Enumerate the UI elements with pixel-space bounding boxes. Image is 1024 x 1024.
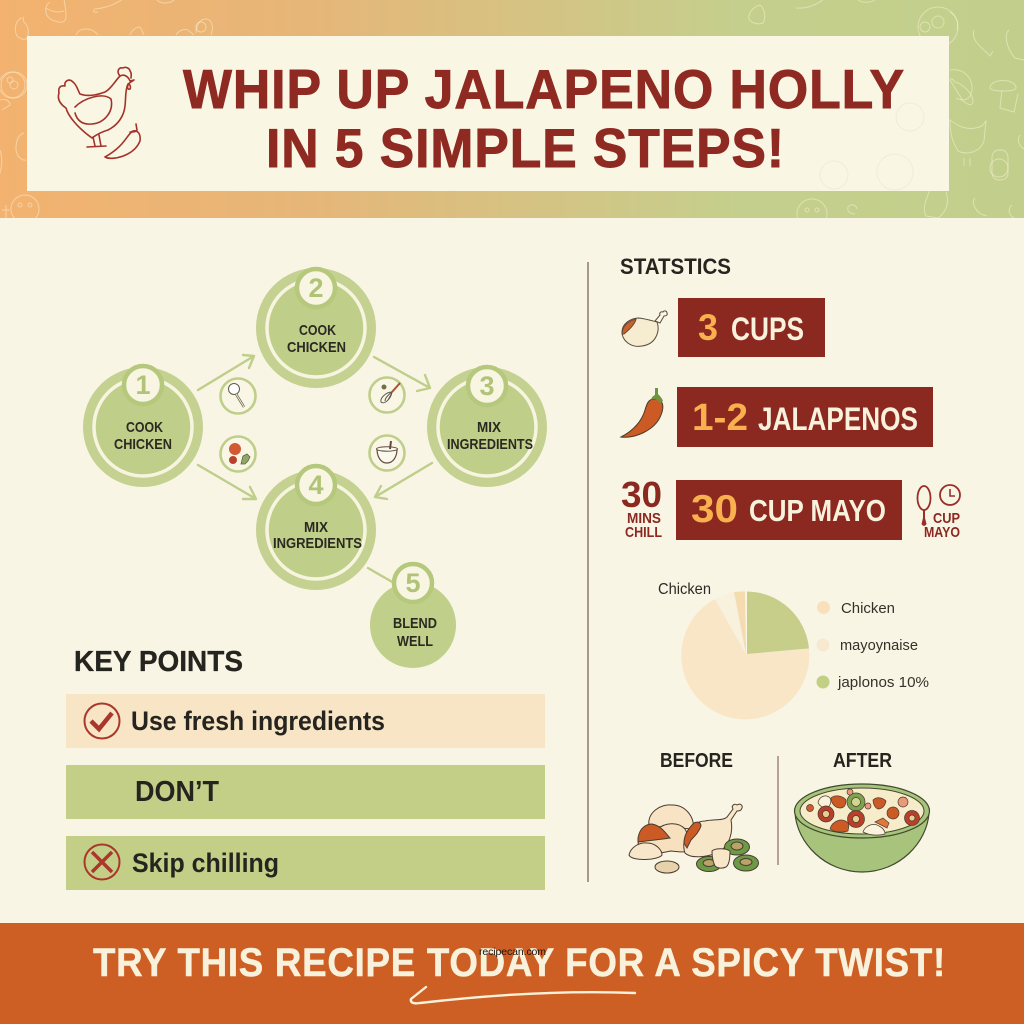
footer banner <box>0 923 1024 1024</box>
icon: chicken leg <box>622 311 667 346</box>
stat bar: jalapenos <box>677 387 933 447</box>
icon: spoon <box>220 378 256 414</box>
icon: check <box>84 704 120 738</box>
step 4: MIX <box>304 519 328 536</box>
icon: whisk <box>370 378 404 412</box>
pie legend: Chicken <box>841 600 895 617</box>
do item: Use fresh ingredients <box>131 706 385 736</box>
icon: spoon, clock and label: MAYO <box>924 524 960 541</box>
stat: chill time: CHILL <box>625 524 662 541</box>
stat bar: cups: 3 <box>698 307 718 348</box>
icon: vegetables <box>220 436 256 472</box>
illustration: raw ingredients <box>629 804 758 873</box>
pie legend <box>816 600 929 691</box>
step 2 <box>256 268 376 388</box>
stat bar: jalapenos: JALAPENOS <box>758 401 918 437</box>
step 1: 1 <box>135 370 151 400</box>
step 3: MIX <box>477 419 501 436</box>
step 2: 2 <box>308 273 324 303</box>
pie chart <box>658 581 809 719</box>
underline stroke <box>411 987 635 1003</box>
call to action: TRY THIS RECIPE TODAY FOR A SPICY TWIST! <box>93 941 946 985</box>
step 5: WELL <box>397 633 433 650</box>
pie label: Chicken <box>658 581 711 598</box>
step 5 <box>370 564 456 668</box>
icon: hen and chili <box>58 67 140 158</box>
step 1: COOK <box>126 419 163 436</box>
illustration: finished salad bowl <box>794 784 930 872</box>
process arrows <box>198 355 432 583</box>
icon: cross <box>84 844 120 880</box>
stat bar: mayo: CUP MAYO <box>749 493 886 528</box>
don't heading bar: DON’T <box>135 776 219 808</box>
before after divider <box>777 756 779 865</box>
title: IN 5 SIMPLE STEPS! <box>266 117 785 179</box>
stat bar: cups <box>678 298 825 357</box>
pie legend: mayoynaise <box>840 637 918 654</box>
stat: chill time: 30 <box>621 474 662 515</box>
icon: spoon, clock and label: CUP <box>933 510 960 527</box>
icon: spoon, clock and label <box>918 485 960 541</box>
step 5: BLEND <box>393 615 437 632</box>
title: WHIP UP JALAPENO HOLLY <box>183 58 905 120</box>
stat bar: cups: CUPS <box>731 311 804 347</box>
don't item <box>66 836 545 890</box>
header banner <box>0 0 1024 229</box>
icon: chili <box>621 388 663 437</box>
step 4: INGREDIENTS <box>273 535 362 552</box>
step 3: INGREDIENTS <box>447 436 533 453</box>
stat: chill time <box>621 474 662 541</box>
divider <box>587 262 589 882</box>
title panel <box>27 36 949 191</box>
after heading: AFTER <box>833 750 892 772</box>
step 3 <box>427 367 547 487</box>
step 5: 5 <box>405 568 421 598</box>
heading: statistics: STATSTICS <box>620 254 731 279</box>
step 4 <box>256 466 376 590</box>
stat bar: mayo <box>676 480 902 540</box>
step 4: 4 <box>308 470 324 500</box>
before heading: BEFORE <box>660 750 733 772</box>
heading: key points: KEY POINTS <box>74 646 243 678</box>
step 1: CHICKEN <box>114 436 172 453</box>
stat bar: jalapenos: 1-2 <box>692 397 748 439</box>
don't item: Skip chilling <box>132 848 279 878</box>
step 3: 3 <box>479 371 495 401</box>
step 2: COOK <box>299 322 336 339</box>
pie legend: japlonos 10% <box>837 674 929 691</box>
do item <box>66 694 545 748</box>
watermark: recipecan.com <box>479 946 546 958</box>
title <box>183 58 905 179</box>
don't heading bar <box>66 765 545 819</box>
step 1 <box>83 366 203 487</box>
stat: chill time: MINS <box>627 510 661 527</box>
step 2: CHICKEN <box>287 339 346 356</box>
stat bar: mayo: 30 <box>691 488 738 531</box>
icon: mixing bowl <box>370 436 404 470</box>
